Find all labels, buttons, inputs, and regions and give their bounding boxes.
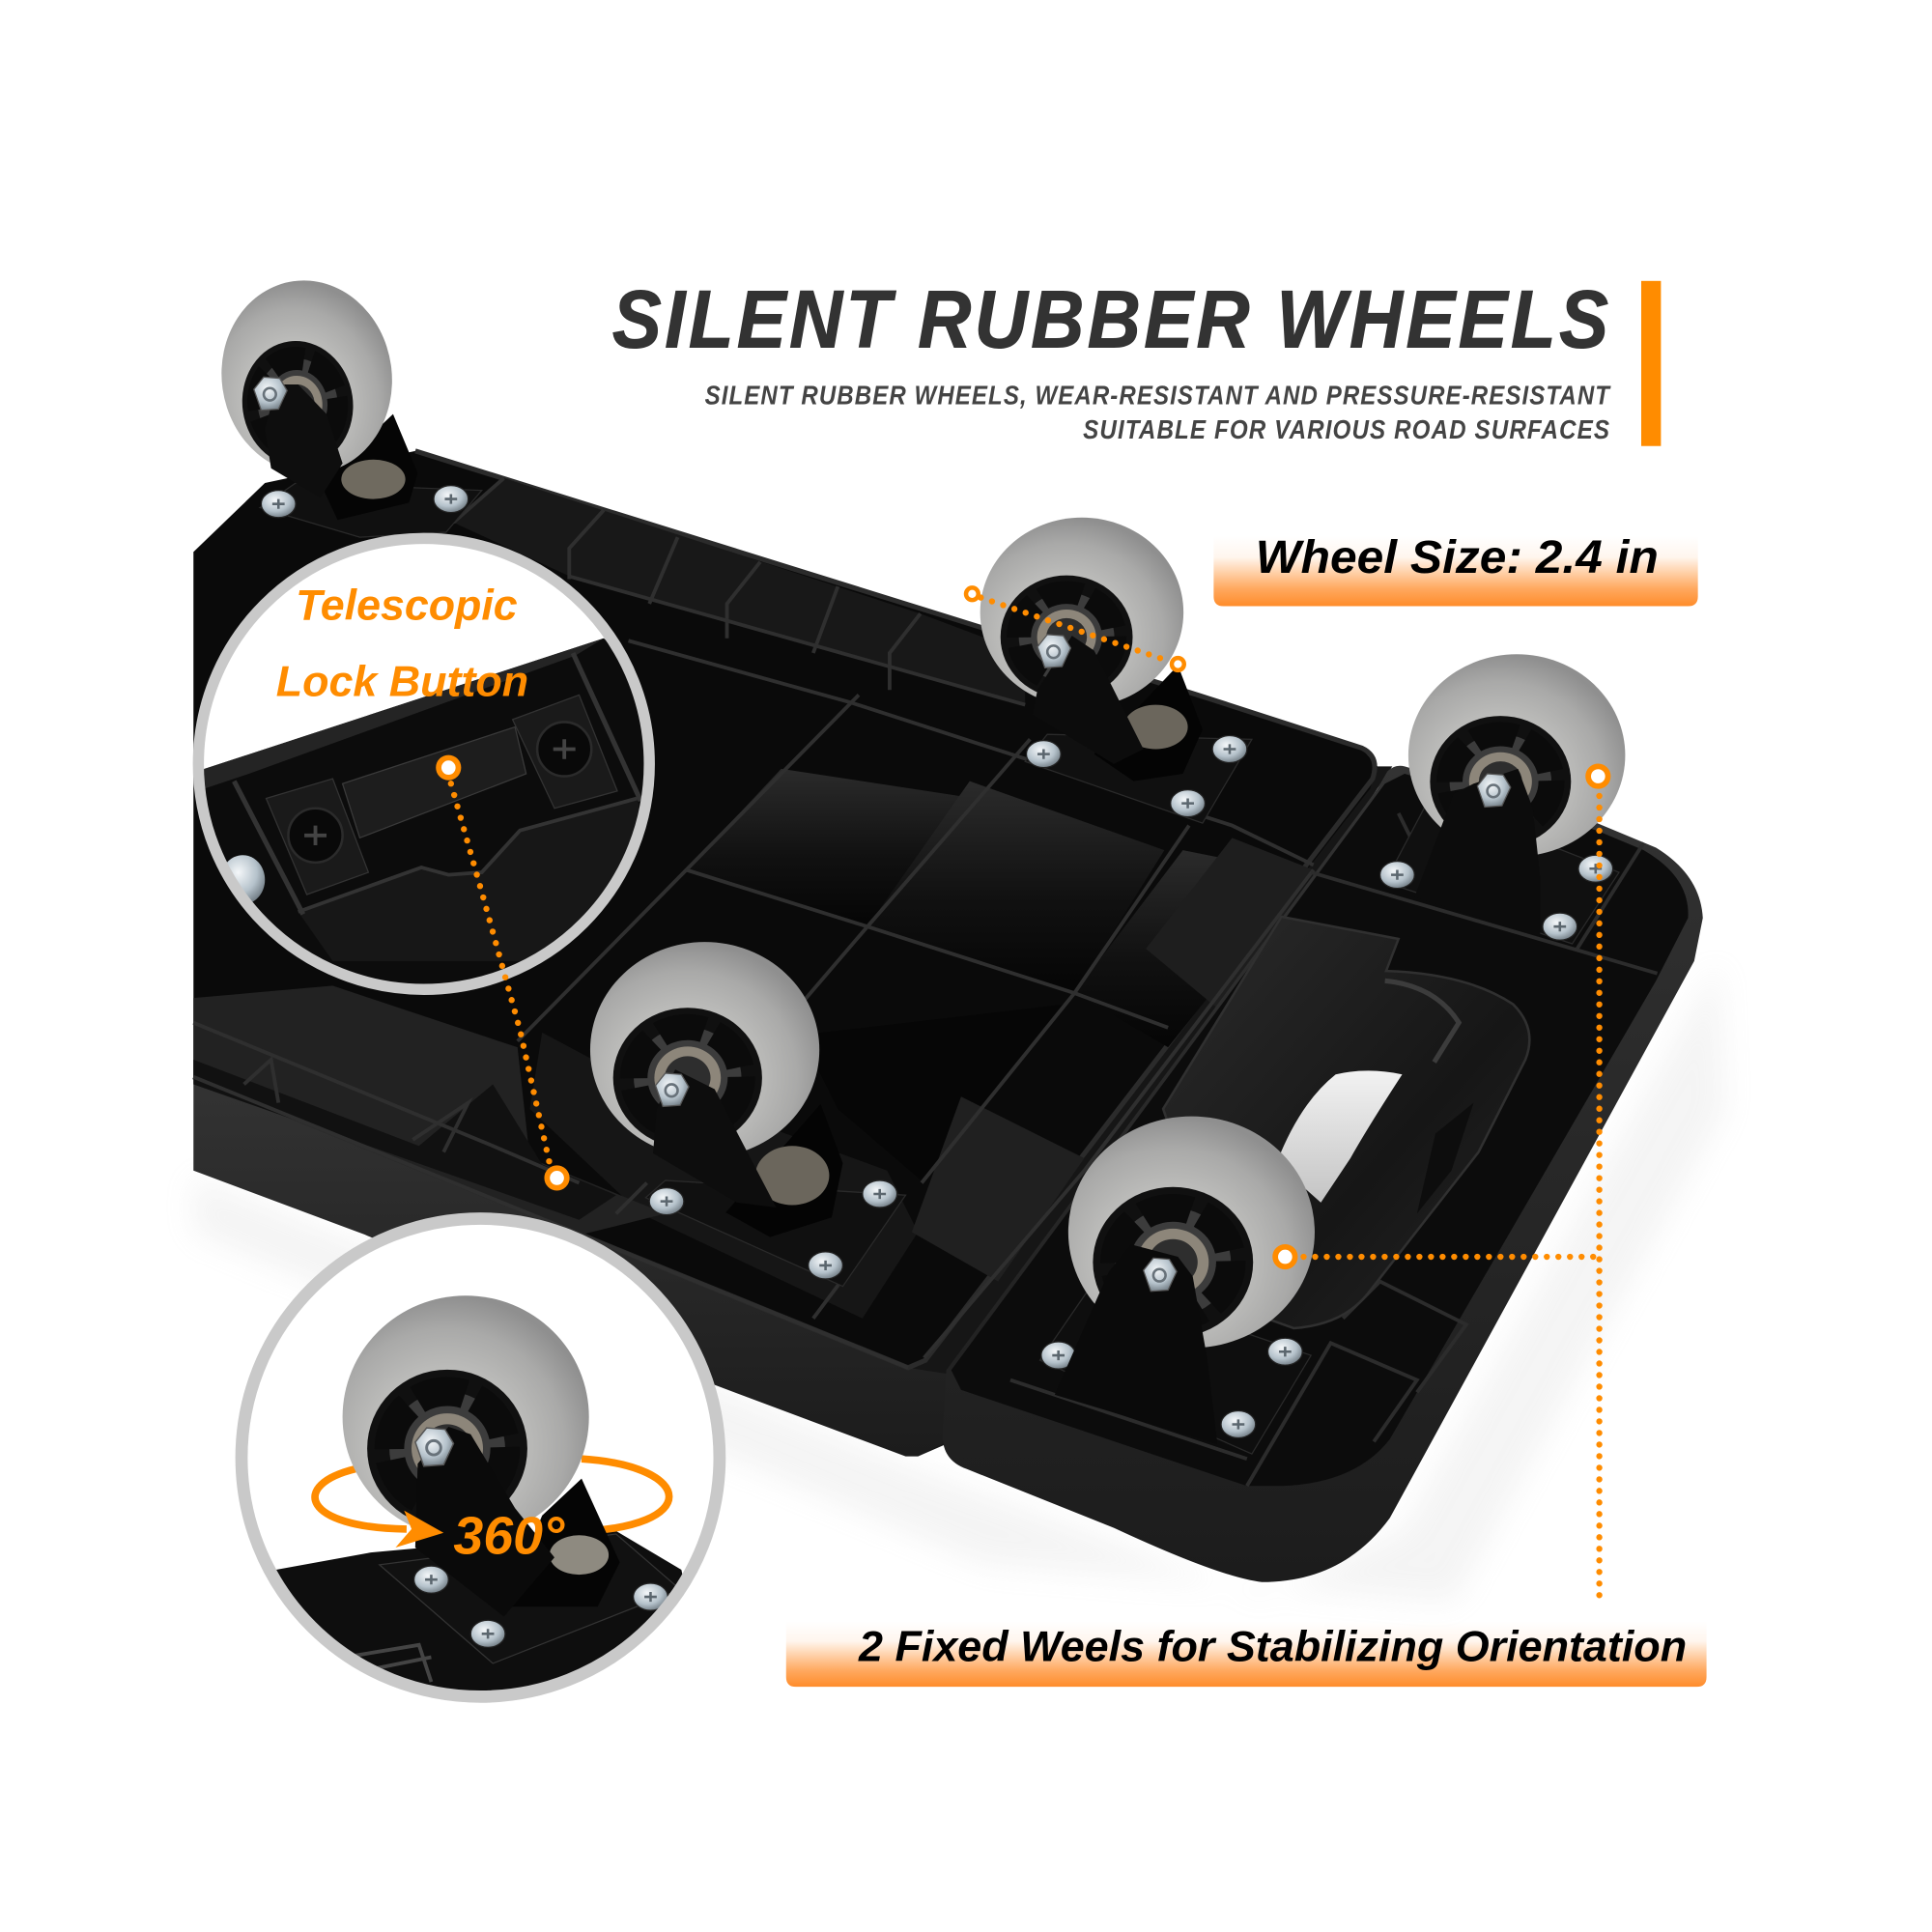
top compartments [453, 478, 1025, 705]
handle tray inner well [952, 774, 1689, 1486]
circle inset: 360 degree swivel [242, 1218, 720, 1725]
inset side wall rib [234, 653, 640, 914]
swivel cup [504, 1479, 620, 1606]
circle inset: telescopic lock button [185, 538, 666, 998]
inset screws [288, 722, 591, 863]
raised plateaus [193, 769, 1314, 1319]
wheel: rear right fixed [1380, 654, 1625, 944]
subtitle: SUITABLE FOR VARIOUS ROAD SURFACES [1083, 414, 1610, 444]
floor shadow [193, 961, 1725, 1602]
tray seam backing [908, 766, 1392, 1457]
callout dots: wheel diameter [966, 587, 1184, 670]
handle tray ribs [1010, 813, 1658, 1486]
inset lower channel [298, 799, 653, 961]
callout: fixed wheels [786, 1622, 1707, 1687]
360 label: 360° [453, 1505, 565, 1565]
callout: fixed wheels: 2 Fixed Weels for Stabilizing Orientation [858, 1623, 1687, 1670]
handle highlight [1385, 980, 1459, 1062]
inset dark tray [204, 638, 643, 983]
wheel: front middle swivel [590, 942, 906, 1287]
tray side wall [193, 1077, 948, 1457]
callout dots: fixed wheels [1275, 766, 1608, 1605]
orange accent bar [1641, 281, 1661, 446]
handle tray shell [943, 766, 1703, 1582]
inset silver screw [227, 855, 265, 902]
orange rotation ring [315, 1459, 669, 1531]
circle inset: telescopic lock button: Lock Button [276, 659, 528, 706]
tray ribs [193, 478, 1314, 1368]
subtitle: SILENT RUBBER WHEELS, WEAR-RESISTANT AND PRESSURE-RESISTANT [705, 380, 1611, 410]
tray top surface [193, 451, 1378, 1368]
inset vent grid [345, 1645, 431, 1682]
tray outer rim [193, 451, 1375, 1368]
callout: wheel size: Wheel Size: 2.4 in [1256, 532, 1659, 583]
rotation arrow head [395, 1511, 443, 1548]
inset top rail [205, 639, 604, 788]
inset right block [513, 695, 617, 809]
wheel: rear left swivel [210, 270, 482, 537]
handle slot [1276, 1070, 1403, 1203]
wheel: rear middle swivel [980, 518, 1252, 823]
callout dots: lock button [439, 757, 567, 1188]
inset button [343, 727, 526, 838]
panel: main folding tray [193, 451, 1378, 1457]
inset mounting plate [380, 1534, 680, 1663]
inset wheel [343, 1295, 589, 1538]
inset left block [267, 779, 368, 895]
callout: wheel size [1213, 532, 1698, 607]
inset tray base [276, 1531, 682, 1690]
inset label: Telescopic [296, 582, 518, 630]
carrying handle [1163, 917, 1529, 1328]
handle recess [1417, 1103, 1474, 1213]
title: SILENT RUBBER WHEELS [612, 274, 1611, 365]
wheel: front right fixed [1040, 1117, 1315, 1454]
subtitle [705, 380, 1611, 444]
panel: handle tray [943, 766, 1703, 1582]
